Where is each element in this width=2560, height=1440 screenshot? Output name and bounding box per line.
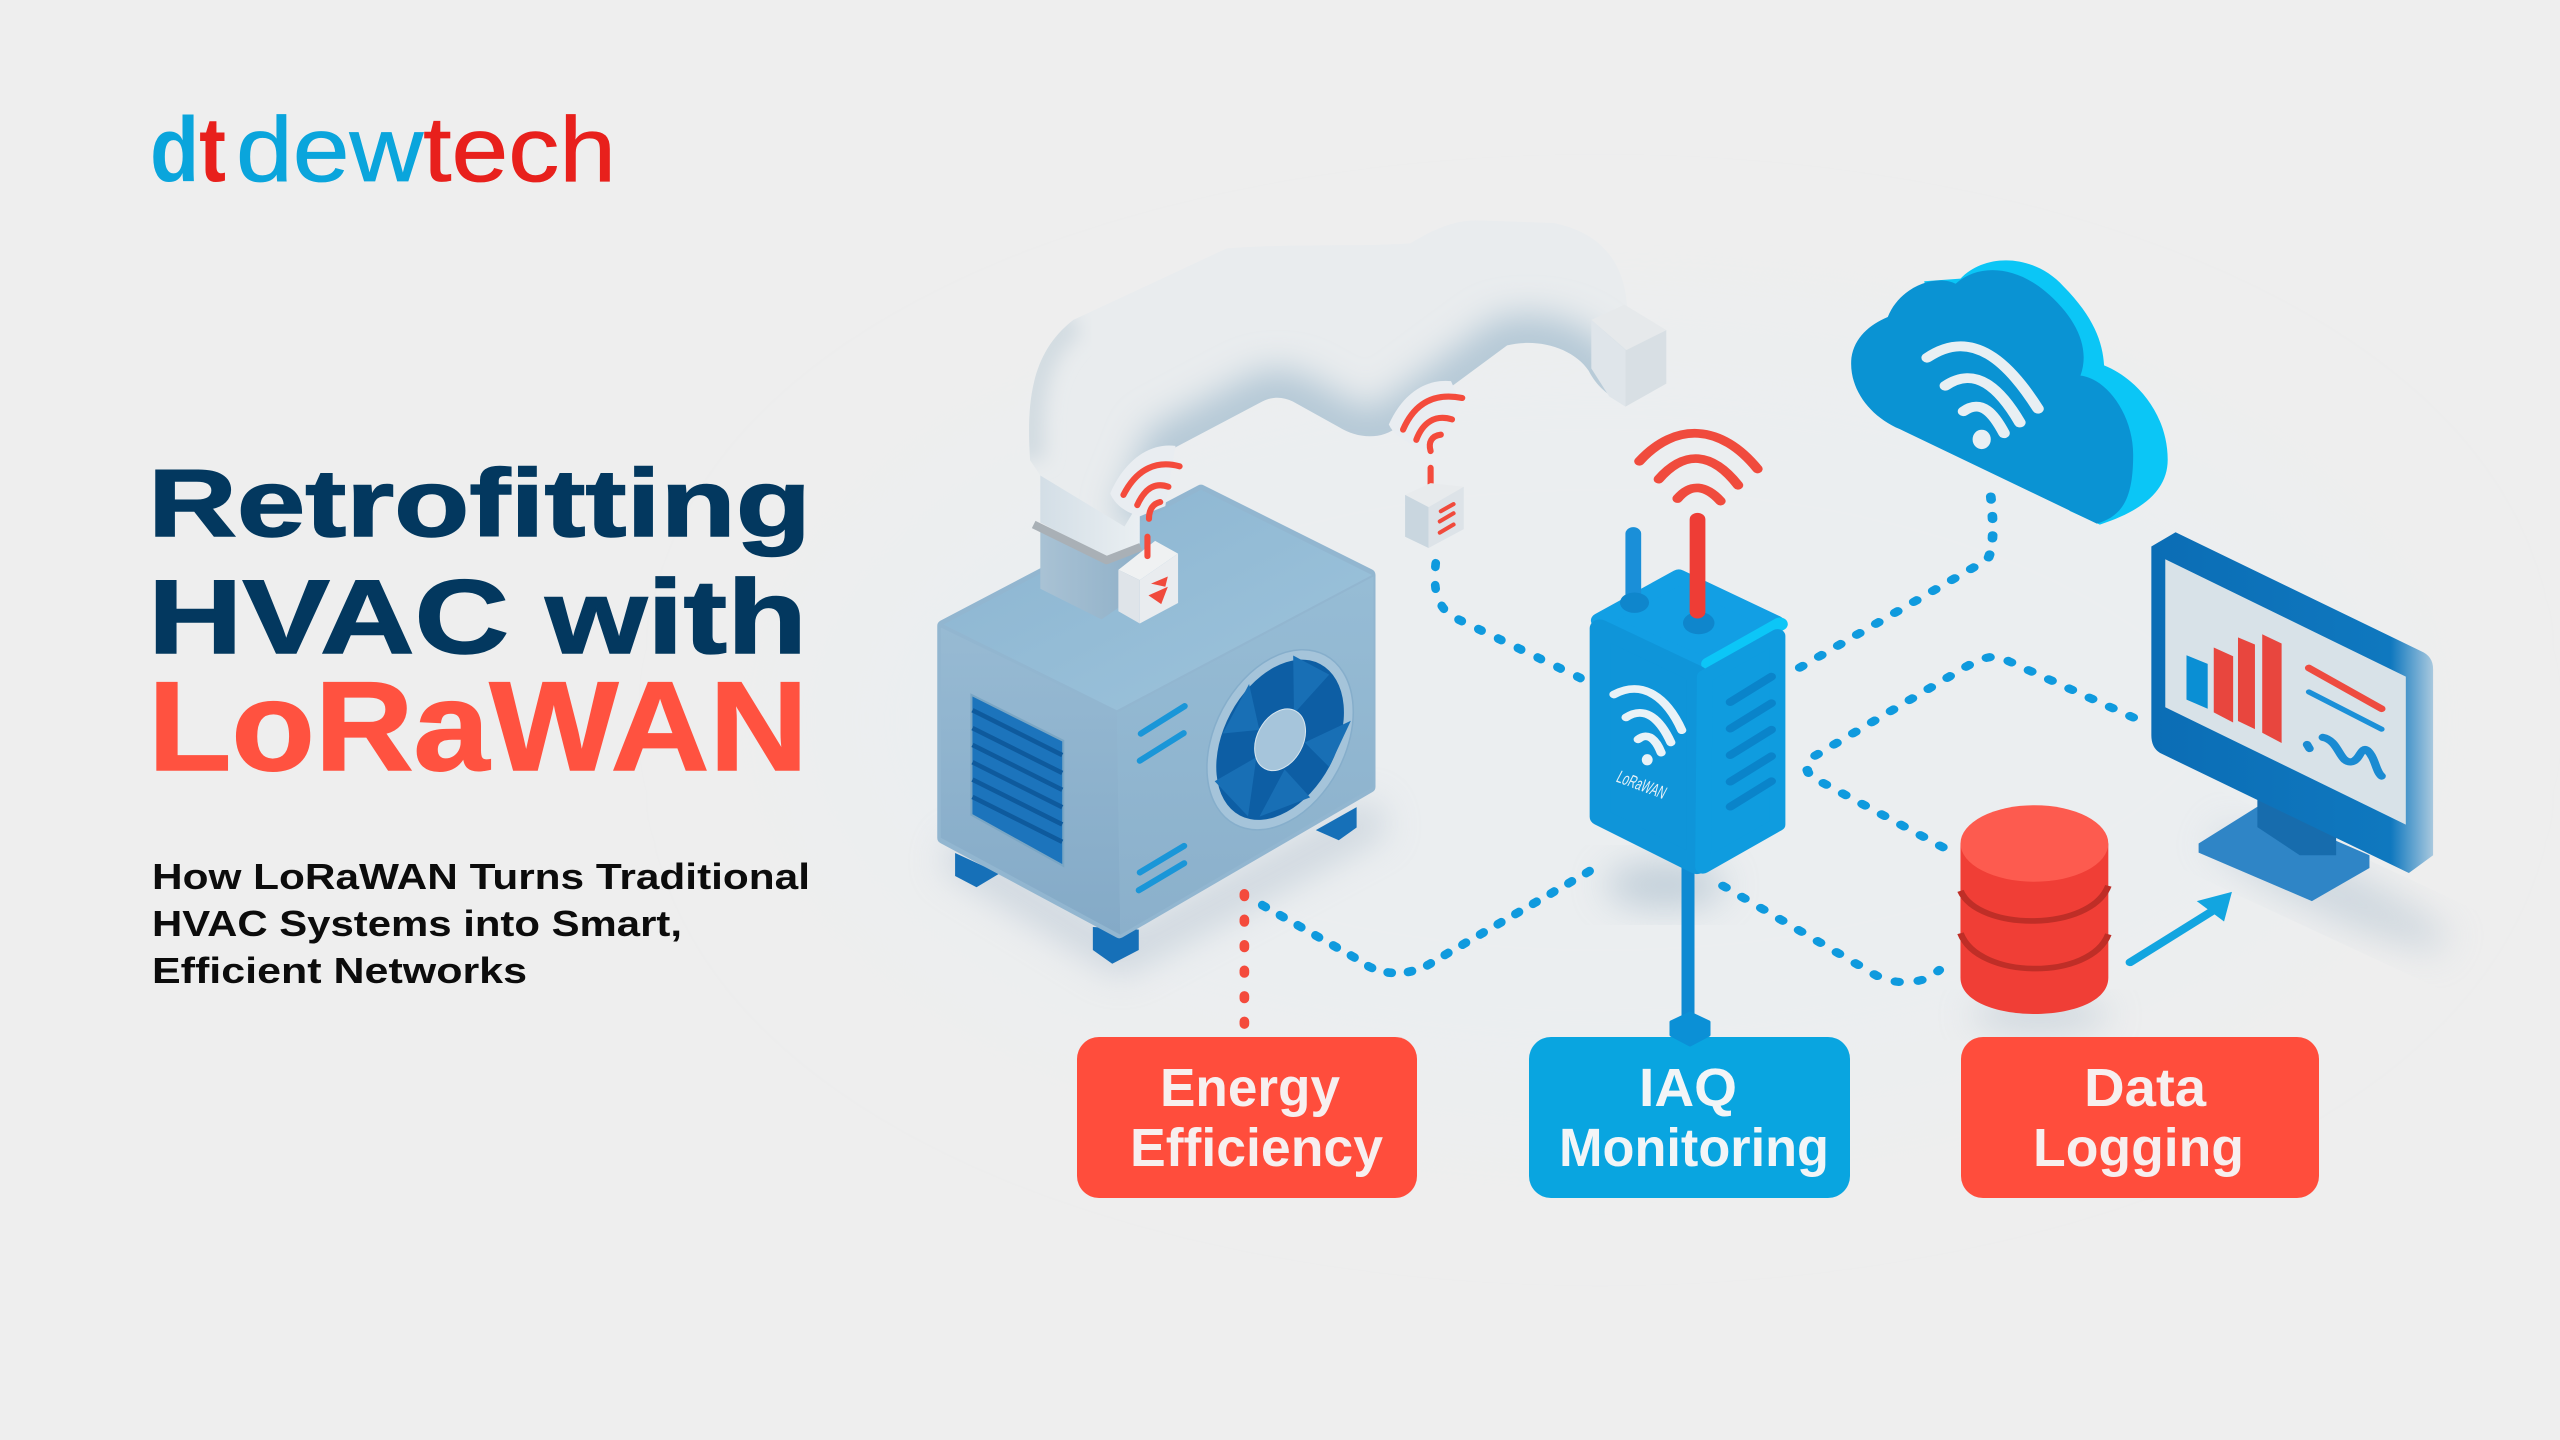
label: Energy Efficiency: [1077, 1037, 1417, 1198]
dotted link: gateway to database: [1723, 886, 1939, 982]
database rings: [1960, 886, 2108, 969]
screen bar chart: [2186, 634, 2282, 743]
sensor 2: [1389, 381, 1464, 548]
gateway red antenna: [1683, 519, 1714, 634]
duct end cap: [1591, 305, 1666, 407]
gateway blue antenna: [1620, 534, 1649, 613]
lorawan gateway: [1600, 433, 1780, 867]
label: IAQ Monitoring: [1529, 1037, 1850, 1198]
sensor 2 patch and wifi: [1389, 381, 1462, 484]
sensor 2 cube: [1405, 483, 1464, 548]
sensor 1 wifi: [1110, 445, 1180, 556]
label: IAQ Monitoring: Monitoring: [1559, 1118, 1829, 1178]
logo: [150, 99, 616, 201]
label: Data Logging: Data: [2084, 1058, 2207, 1118]
monitor stand base: [2199, 807, 2369, 901]
sensor 1: [1110, 445, 1180, 623]
subtitle: [152, 856, 810, 991]
label: Data Logging: [1961, 1037, 2319, 1198]
label: IAQ Monitoring: IAQ: [1639, 1058, 1737, 1118]
label: Energy Efficiency: Energy: [1160, 1058, 1340, 1118]
sensor 1 cube: [1118, 541, 1178, 623]
hvac outdoor unit: [941, 490, 1383, 964]
feature labels: [1077, 1037, 2319, 1198]
screen lines: [2309, 668, 2382, 729]
unit feet: [955, 807, 1357, 964]
monitor: [2151, 532, 2433, 901]
fan: [1177, 624, 1383, 855]
left illustration coordinates: [941, 215, 1666, 1057]
logo mark: dt: dt: [150, 99, 226, 201]
cloud wifi icon: [1927, 346, 2038, 449]
dotted link: gateway to cloud: [1796, 497, 1993, 670]
cable to IAQ Monitoring: [1682, 860, 1694, 1025]
cloud front: [1851, 270, 2133, 524]
vent grille: [971, 695, 1063, 866]
dotted link: sensor to gateway: [1435, 563, 1584, 680]
gateway label: LoRaWAN: [1613, 768, 1670, 803]
duct: [1022, 215, 1666, 619]
arrow: database to monitor: [2130, 892, 2232, 962]
database body: [1960, 843, 2108, 1014]
database: [1960, 805, 2108, 1014]
monitor stand neck: [2257, 797, 2336, 855]
database top: [1960, 805, 2108, 882]
unit silhouette: [943, 491, 1369, 932]
dotted link: unit to gateway: [1262, 863, 1603, 973]
subtitle line 1: How LoRaWAN Turns Traditional: [152, 856, 810, 897]
gateway top face: [1600, 577, 1776, 664]
duct lower box on unit: [1040, 527, 1140, 619]
cloud: [1851, 260, 2168, 525]
label: Data Logging: Logging: [2033, 1118, 2244, 1178]
side marks upper: [1140, 706, 1185, 761]
duct collar: [1034, 524, 1141, 560]
gateway vents: [1730, 677, 1771, 807]
gateway top highlight: [1709, 624, 1780, 664]
subtitle line 2: HVAC Systems into Smart,: [152, 903, 682, 944]
subtitle line 3: Efficient Networks: [152, 950, 527, 991]
gateway red signal: [1639, 433, 1758, 501]
duct drop section: [1040, 455, 1140, 557]
gateway wifi icon: [1614, 689, 1682, 765]
gateway side face: [1703, 636, 1778, 867]
unit right face: [1117, 577, 1373, 935]
monitor frame: [2151, 532, 2433, 873]
cable connector: [1671, 1013, 1709, 1045]
side marks lower: [1139, 846, 1184, 890]
screen sparkline: [2307, 737, 2382, 776]
monitor screen: [2165, 559, 2406, 825]
dotted link: monitor to database via gateway: [1807, 657, 2133, 849]
title line 3: LoRaWAN: [148, 655, 808, 797]
unit top face: [943, 490, 1372, 710]
cloud extrusion: [1924, 260, 2168, 525]
gateway front face: [1600, 628, 1697, 865]
title: [148, 450, 811, 797]
duct body: [1029, 292, 1626, 526]
right illustration coordinates: [1600, 260, 2433, 1014]
soft shadows: [950, 813, 2458, 1029]
logo wordmark: dewtech: dewtech: [236, 99, 616, 201]
label: Energy Efficiency: Efficiency: [1130, 1118, 1383, 1178]
title line 2: HVAC with: [148, 559, 807, 676]
dotted link: unit to energy efficiency: [1235, 894, 1254, 1057]
unit left face: [941, 628, 1120, 935]
title line 1: Retrofitting: [148, 450, 811, 557]
